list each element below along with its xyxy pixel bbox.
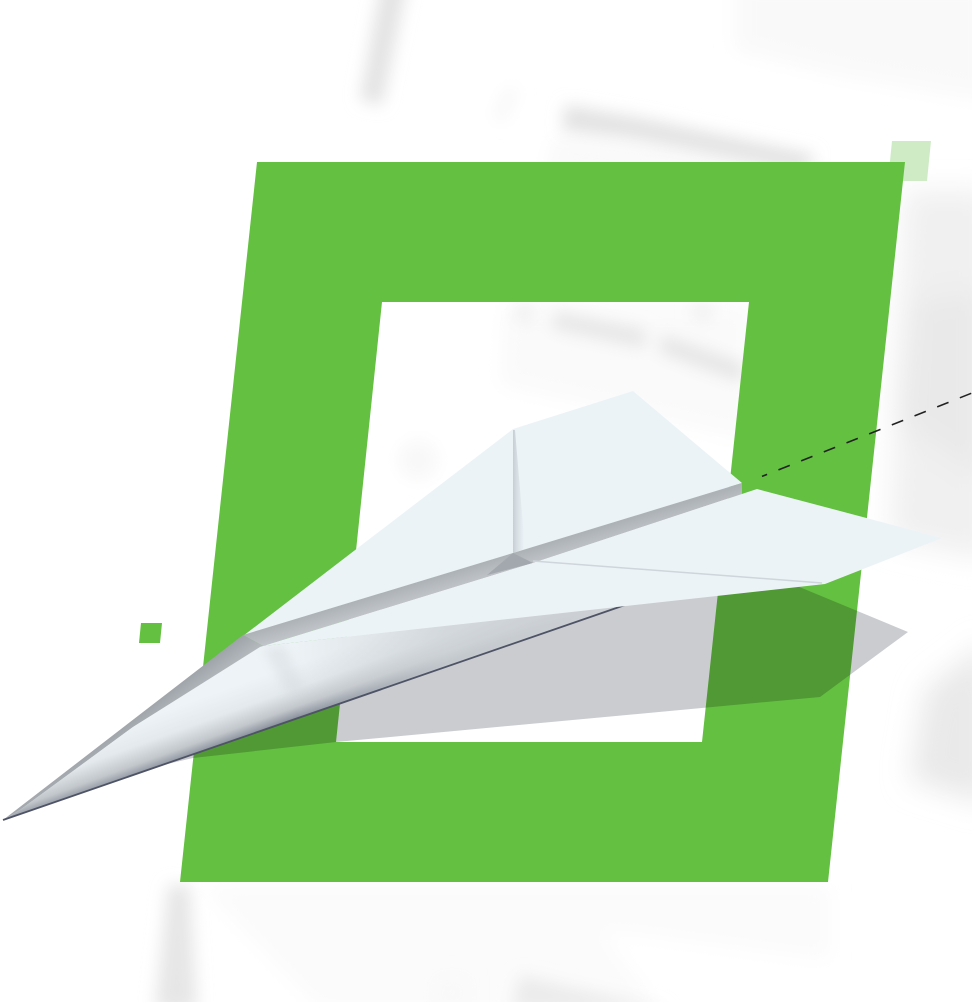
far wing vertical crease bbox=[513, 430, 525, 553]
light green accent square bbox=[888, 141, 931, 181]
plane shadow bbox=[150, 586, 908, 768]
small green accent square bbox=[139, 623, 162, 643]
dark inner fold at crease bbox=[487, 553, 533, 575]
dark keel line bbox=[3, 605, 625, 820]
grey fold band along wing bbox=[243, 483, 742, 646]
near wing crease bbox=[533, 561, 822, 583]
grey fold band along nose bbox=[3, 635, 263, 820]
far wing bbox=[243, 391, 742, 636]
dashed flight path bbox=[762, 393, 972, 476]
body shading under near wing bbox=[263, 605, 625, 717]
near wing bbox=[263, 489, 942, 646]
soft fold on body bbox=[263, 646, 305, 695]
paper plane bbox=[3, 391, 942, 820]
green parallelogram frame bbox=[180, 162, 905, 882]
lower body bbox=[3, 605, 625, 820]
